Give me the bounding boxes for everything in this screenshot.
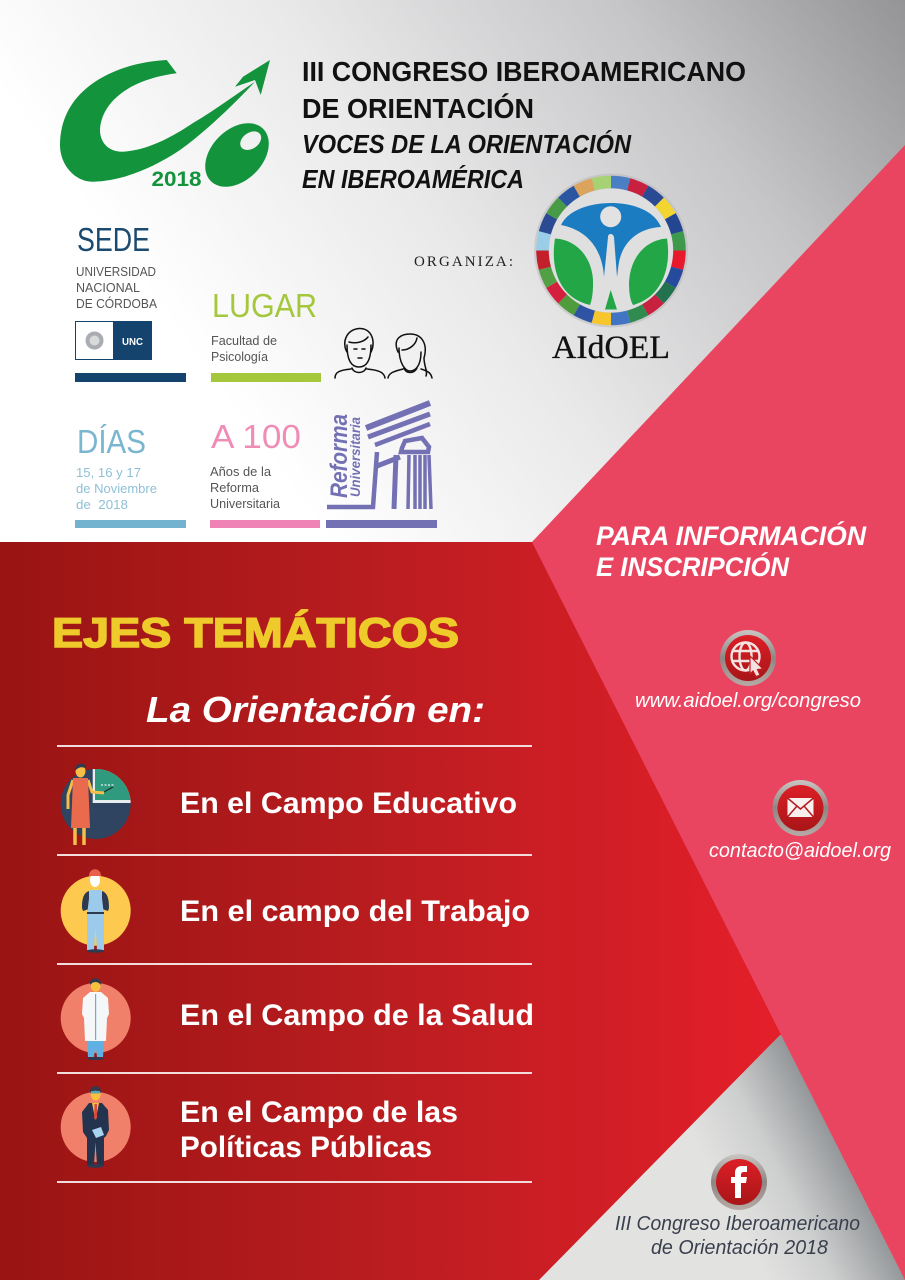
heading: ejes tematicos: EJES TEMÁTICOS bbox=[52, 609, 459, 656]
block: lugar: Facultad de bbox=[211, 334, 277, 348]
logo: AIdOEL: AIdOEL bbox=[552, 330, 670, 366]
label: facebook page: III Congreso Iberoamericano bbox=[615, 1212, 860, 1235]
block: a 100: Universitaria bbox=[210, 497, 280, 511]
block: a 100: A 100 bbox=[211, 418, 301, 455]
item: politicas publicas: En el Campo de las bbox=[180, 1096, 458, 1129]
block: a 100: Años de la bbox=[210, 465, 271, 479]
item: campo de la salud bbox=[61, 978, 534, 1060]
logo: congress bbox=[60, 60, 281, 199]
block: lugar: LUGAR bbox=[212, 287, 317, 324]
title: EN IBEROAMÉRICA bbox=[302, 164, 524, 194]
heading: para informacion bbox=[596, 520, 866, 582]
icon: worker bbox=[61, 869, 131, 953]
block: dias: de 2018 bbox=[76, 498, 128, 512]
logo: congress: 2018 bbox=[152, 167, 202, 191]
item: campo educativo bbox=[61, 764, 517, 845]
block: a 100: Reforma bbox=[210, 481, 259, 495]
icon: reforma universitaria: Universitaria bbox=[348, 417, 363, 497]
icon: reforma universitaria: Reforma bbox=[326, 414, 353, 498]
block: a 100 bbox=[210, 418, 320, 528]
label: facebook page bbox=[615, 1212, 860, 1259]
item: campo del trabajo bbox=[61, 869, 530, 953]
title: DE ORIENTACIÓN bbox=[302, 93, 534, 124]
block: lugar bbox=[211, 287, 321, 382]
icon: manager bbox=[61, 1086, 131, 1168]
blue figure bbox=[561, 203, 661, 277]
link: email: contacto@aidoel.org bbox=[709, 839, 892, 862]
icon: doctor bbox=[61, 978, 131, 1060]
block: lugar: Psicología bbox=[211, 350, 268, 364]
item: campo de la salud: En el Campo de la Salud bbox=[180, 999, 534, 1032]
item: politicas publicas: Políticas Públicas bbox=[180, 1131, 432, 1164]
ring of colored segments bbox=[514, 154, 708, 347]
heading: para informacion: PARA INFORMACIÓN bbox=[596, 520, 866, 551]
icon: mail button bbox=[772, 780, 828, 836]
panel: red section bbox=[0, 542, 905, 1280]
title: VOCES DE LA ORIENTACIÓN bbox=[302, 129, 632, 159]
subheading: la orientacion en: La Orientación en: bbox=[146, 689, 485, 730]
green leaves bbox=[554, 238, 668, 310]
icon: web button bbox=[720, 630, 776, 686]
panel: gray bottom triangle bbox=[539, 1035, 905, 1280]
icon: two people bbox=[335, 328, 432, 378]
background: light gray gradient bbox=[0, 0, 905, 542]
block: dias: 15, 16 y 17 bbox=[76, 466, 141, 480]
icon: facebook button bbox=[711, 1154, 767, 1210]
heading: para informacion: E INSCRIPCIÓN bbox=[596, 551, 789, 582]
logo: AIdOEL bbox=[514, 154, 708, 366]
panel: pink diagonal band bbox=[532, 145, 905, 1280]
title: III CONGRESO IBEROAMERICANO bbox=[302, 56, 746, 87]
icon: teacher bbox=[61, 764, 133, 845]
link: website: www.aidoel.org/congreso bbox=[635, 689, 861, 712]
label: organiza: ORGANIZA: bbox=[414, 254, 513, 270]
divider lines bbox=[57, 745, 532, 1183]
block: sede: UNIVERSIDAD bbox=[76, 265, 156, 279]
icon: UNC logo bbox=[76, 321, 152, 360]
block: sede: SEDE bbox=[77, 221, 150, 258]
block: sede: DE CÓRDOBA bbox=[76, 296, 158, 311]
title bbox=[302, 56, 746, 194]
block: dias: de Noviembre bbox=[76, 482, 157, 496]
block: dias: DÍAS bbox=[77, 423, 146, 460]
block: sede: NACIONAL bbox=[76, 281, 140, 295]
label: facebook page: de Orientación 2018 bbox=[651, 1236, 829, 1259]
item: politicas publicas bbox=[61, 1086, 458, 1168]
block: dias bbox=[75, 423, 186, 528]
item: campo educativo: En el Campo Educativo bbox=[180, 787, 517, 820]
block: sede bbox=[75, 221, 186, 382]
icon: UNC logo: UNC bbox=[122, 337, 143, 348]
item: campo del trabajo: En el campo del Trabajo bbox=[180, 895, 530, 928]
icon: reforma universitaria bbox=[326, 403, 437, 528]
